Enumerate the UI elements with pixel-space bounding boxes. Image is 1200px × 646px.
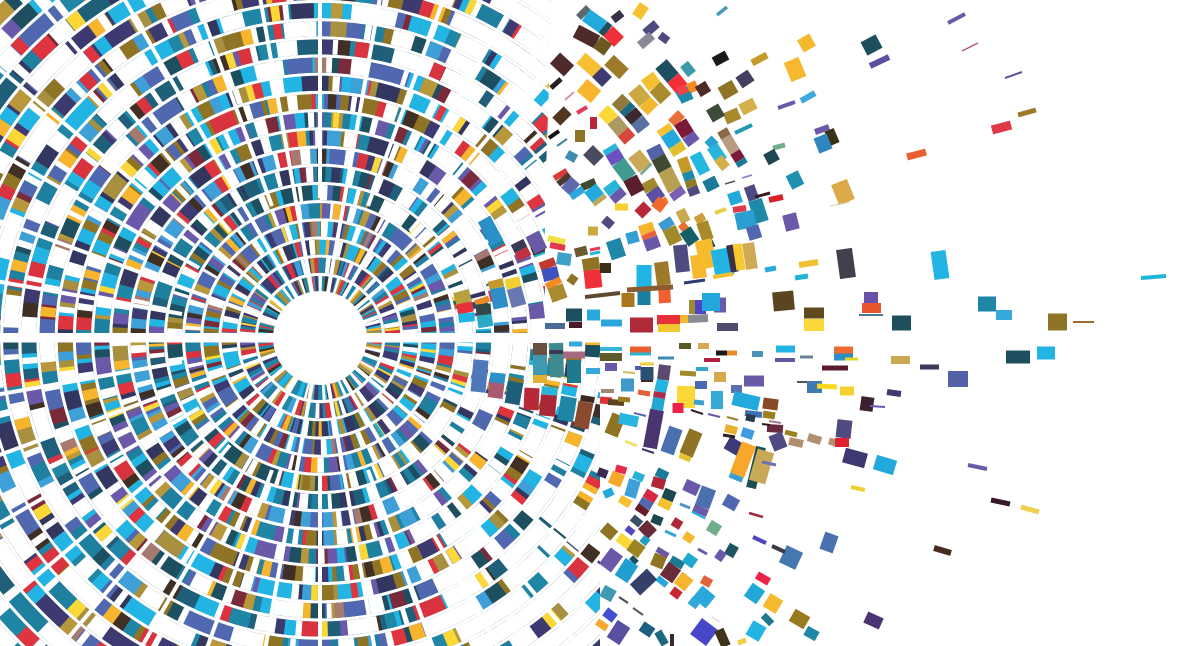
sparser gaps in the right sector (378, 0, 600, 646)
scattered blocks: upper right (678, 7, 1166, 327)
scattered blocks: lower right (600, 346, 1055, 643)
ring 10 (102, 120, 538, 556)
ring 23 (0, 0, 775, 646)
radial white spokes (0, 0, 871, 646)
ring 24 (0, 0, 793, 646)
ring 13 (47, 65, 593, 611)
scattered blocks: upper fan (461, 8, 694, 327)
wheel of concentric striped rings (0, 0, 600, 646)
ring 20 (0, 0, 720, 646)
ring 22 (0, 0, 757, 646)
ring 14 (29, 47, 611, 629)
ring 25 (0, 0, 811, 646)
ring 4 (211, 229, 429, 447)
ring 5 (193, 211, 447, 465)
ring 8 (138, 156, 502, 520)
ring 18 (0, 0, 684, 646)
ring 19 (0, 0, 702, 646)
scattered blocks: middle band (478, 258, 680, 428)
ring 12 (65, 83, 575, 593)
ring 2 (247, 265, 393, 411)
ring 3 (229, 247, 411, 429)
ring 1 (266, 284, 374, 392)
ring 6 (174, 192, 466, 484)
ring 17 (0, 0, 666, 646)
ring 15 (11, 29, 629, 646)
ring 11 (84, 102, 556, 574)
ring 9 (120, 138, 520, 538)
ring 21 (0, 0, 738, 646)
ring 7 (156, 174, 484, 502)
ring 16 (0, 10, 648, 646)
ring 26 (0, 0, 830, 646)
